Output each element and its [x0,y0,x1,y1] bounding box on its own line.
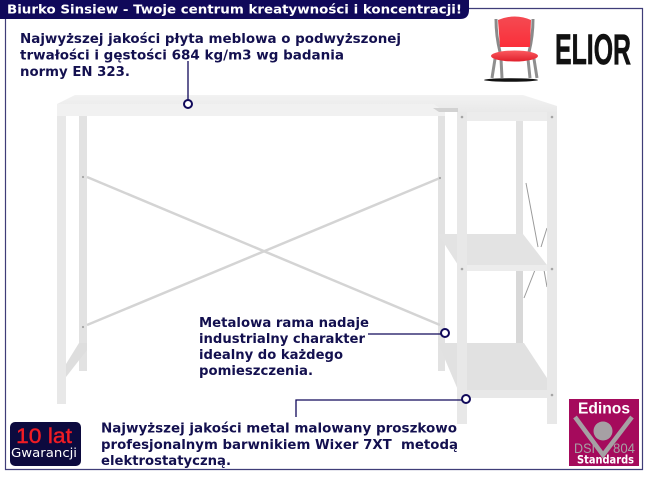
callout marker: metal frame [368,329,449,337]
badge: 10 year warranty [10,422,81,466]
shelf upper [438,234,547,271]
badge: Edinos standards: Standards [577,452,634,466]
badge: Edinos standards: Edinos [578,400,630,418]
badge: Edinos standards: DSI [574,441,595,456]
badge: Edinos standards [569,399,639,466]
table top [57,95,557,121]
text block: metal frame: Metalowa rama nadaje [199,316,369,331]
desk back legs and left legs [66,110,523,377]
title bar [0,0,469,19]
side braces [524,183,547,298]
badge: Edinos standards: 804 [613,441,635,456]
text block: board quality: Najwyższej jakości płyta meblowa o podwyższonej [20,32,401,47]
callout marker: powder coating [296,395,470,417]
text block: metal frame: idealny do każdego [199,348,343,363]
bolts [82,116,553,396]
shelf lower [438,343,547,398]
title text: Biurko Sinsiew - Twoje centrum kreatywności i koncentracji! [7,2,462,16]
front legs [57,112,557,424]
callout marker: table top [184,61,192,108]
text block: powder coating: profesjonalnym barwnikiem Wixer 7XT metodą [101,438,458,453]
text block: powder coating: Najwyższej jakości metal malowany proszkowo [101,422,457,436]
icon: red chair logo [484,16,538,82]
text block: powder coating [101,422,458,469]
desk illustration [57,95,557,424]
text block: metal frame [199,316,369,379]
text block: board quality: trwałości i gęstości 684 kg/m3 wg badania [20,48,344,64]
text block: board quality [20,32,401,80]
text block: board quality: normy EN 323. [20,65,130,80]
badge: 10 year warranty: Gwarancji [11,446,77,460]
cross braces [87,177,440,325]
text block: metal frame: pomieszczenia. [199,364,313,379]
badge: 10 year warranty: 10 lat [16,425,72,448]
text block: metal frame: industrialny charakter [199,332,366,347]
text block: powder coating: elektrostatyczną. [101,454,231,469]
